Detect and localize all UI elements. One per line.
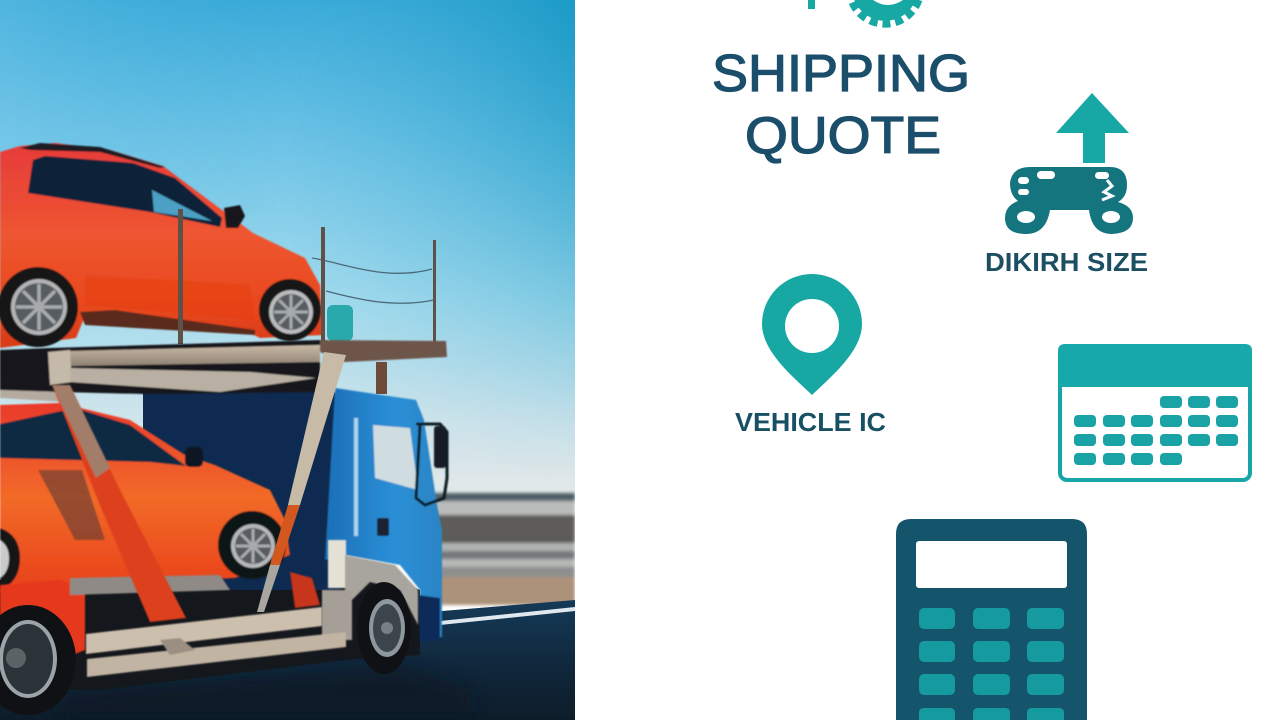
teal tank behind deck <box>327 305 353 341</box>
chassis and lower deck <box>0 540 418 660</box>
icon: calculator <box>896 519 1087 720</box>
label: vehicle ic: VEHICLE IC <box>735 407 886 437</box>
front diagonal strut <box>257 352 346 612</box>
lower car paint shadow <box>38 470 105 540</box>
transporter upright posts <box>178 209 436 344</box>
lower car rear rim <box>0 540 9 578</box>
lower car window <box>0 408 186 466</box>
heading: shipping quote: SHIPPING <box>712 45 970 103</box>
lower car <box>0 403 290 592</box>
rear diagonal red strut <box>52 385 186 622</box>
lower car mirror <box>185 447 203 467</box>
cab door strip <box>354 418 358 536</box>
lower car rear wheel <box>0 528 20 590</box>
lower car wheel <box>218 511 286 579</box>
cab mirror <box>416 424 447 505</box>
top car orange reflection <box>85 275 255 320</box>
truck ground shadow <box>60 665 470 712</box>
top car window reflection <box>152 190 212 221</box>
top car side window <box>28 156 222 227</box>
icon: up arrow <box>1056 93 1129 163</box>
sky background <box>0 0 575 500</box>
heading: shipping quote: QUOTE <box>745 107 941 165</box>
cab lower bumper <box>418 595 440 642</box>
top car front wheel <box>259 279 321 341</box>
truck roof spout <box>376 362 387 394</box>
icon: vehicle size <box>1005 167 1133 234</box>
truck cab <box>325 388 447 642</box>
icon: calendar <box>1058 344 1252 480</box>
top car mirror <box>224 205 245 228</box>
cab window <box>373 425 418 490</box>
top car lower sill <box>80 310 255 335</box>
dark underside behind truck <box>0 560 420 690</box>
top car roof rail <box>20 143 165 168</box>
cab mirror glass <box>434 426 446 468</box>
cab door handle <box>377 518 389 536</box>
panel: white icon area <box>575 0 1280 720</box>
truck rear wheel <box>0 605 76 715</box>
lower chassis silver rails <box>86 607 346 677</box>
guard wires <box>312 258 434 303</box>
top car <box>0 143 323 348</box>
top car body <box>0 143 323 348</box>
roadside guard rail bands <box>430 493 575 605</box>
truck front wheel <box>357 582 411 674</box>
road surface <box>0 600 575 720</box>
lower car body <box>0 403 290 592</box>
icon: location pin <box>762 274 862 395</box>
road lane marking <box>440 607 575 625</box>
heading: shipping quote <box>712 45 970 165</box>
panel: photo of car transporter truck <box>0 0 575 720</box>
upper deck frame <box>0 340 447 402</box>
top car rear wheel <box>0 267 78 347</box>
icon: gear <box>808 0 919 24</box>
truck cargo box <box>143 385 340 590</box>
label: dikikh size: DIKIRH SIZE <box>985 247 1148 277</box>
